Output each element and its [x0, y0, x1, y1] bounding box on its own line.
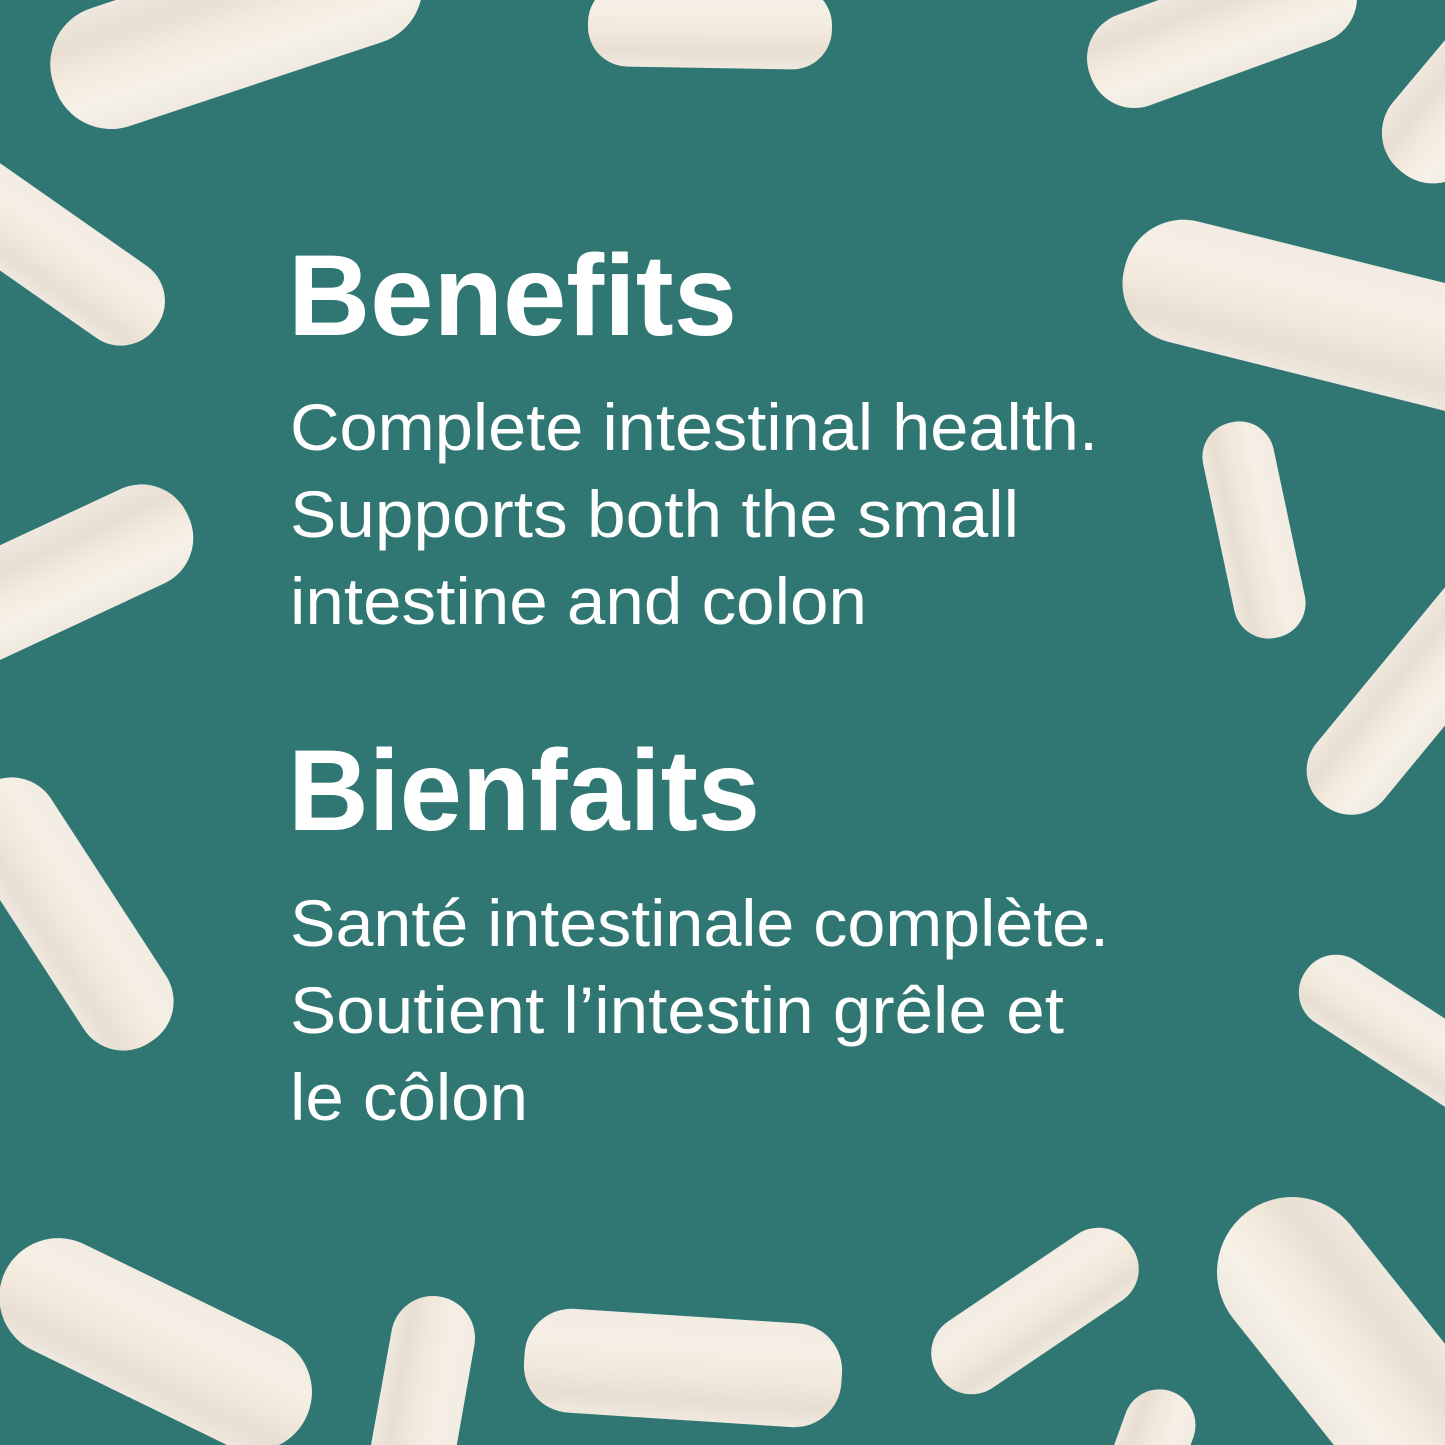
capsule: right lower	[1285, 941, 1445, 1139]
text block: french description	[290, 886, 1109, 1134]
french section	[288, 727, 1109, 1134]
text block: french description: Soutient l’intestin grêle et	[290, 973, 1064, 1047]
heading: Benefits: Benefits	[288, 232, 737, 360]
text block: english description	[290, 390, 1098, 638]
text block: french description: Santé intestinale complète.	[290, 886, 1109, 960]
text block: english description: Supports both the small	[290, 477, 1019, 551]
capsule: bottom right angled	[916, 1213, 1154, 1409]
capsule: right small	[1196, 415, 1312, 645]
heading: Bienfaits: Bienfaits	[288, 727, 760, 855]
text block: french description: le côlon	[290, 1060, 528, 1134]
capsule: bottom right large	[1217, 1197, 1445, 1445]
capsule: bottom center	[521, 1306, 845, 1430]
text block: english description: intestine and colon	[290, 564, 867, 638]
text block: english description: Complete intestinal health.	[290, 390, 1098, 464]
capsule: top center	[587, 0, 833, 70]
capsule: left middle	[0, 468, 210, 700]
capsule: bottom left small	[371, 1296, 475, 1445]
capsule: right middle	[1289, 522, 1445, 832]
capsule: left lower	[0, 759, 192, 1069]
capsule: right large	[1110, 207, 1445, 437]
capsule: top left	[35, 0, 438, 145]
capsule: bottom left	[0, 1238, 312, 1445]
capsule: right top corner	[1362, 0, 1445, 203]
capsule: bottom small	[1114, 1389, 1195, 1445]
english section	[288, 232, 1098, 638]
capsule: top right	[1074, 0, 1370, 121]
capsule: left upper	[0, 136, 182, 362]
